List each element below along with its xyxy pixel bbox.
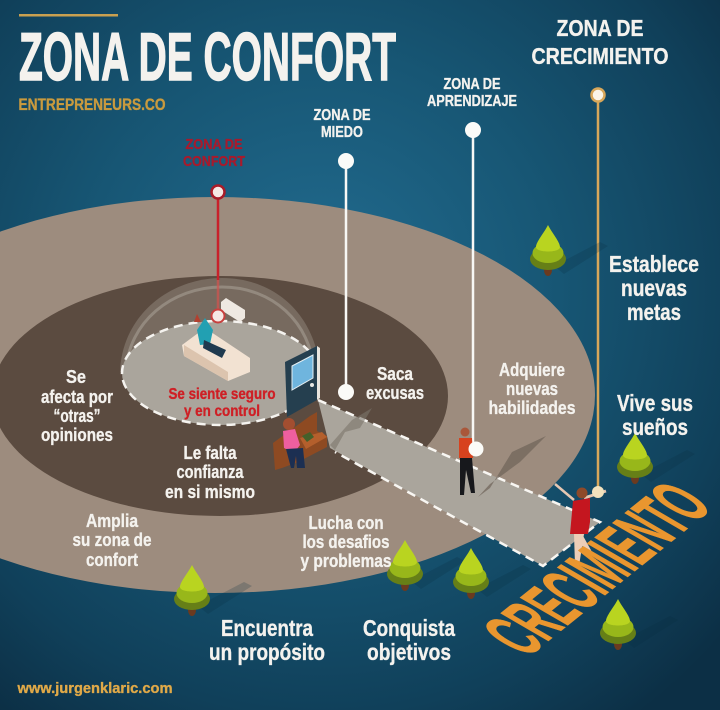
door shadow on path bbox=[330, 408, 372, 450]
air conditioner bbox=[221, 298, 245, 322]
dancing woman in red bbox=[555, 484, 606, 566]
path dashed edges bbox=[318, 400, 600, 566]
pin line: zona de miedo bbox=[338, 153, 354, 400]
comfort zone floor bbox=[122, 321, 318, 425]
label: zona de aprendizaje bbox=[427, 76, 517, 110]
website: www.jurgenklaric.com bbox=[17, 680, 172, 697]
text: lucha con los desafios: Lucha con bbox=[308, 512, 384, 533]
standing woman bbox=[459, 428, 484, 495]
text: se afecta por otras opiniones bbox=[41, 366, 113, 445]
text: se siente seguro bbox=[168, 386, 276, 420]
text: se siente seguro: y en control bbox=[184, 403, 260, 420]
accent line bbox=[19, 14, 118, 16]
text: saca excusas bbox=[366, 363, 424, 403]
label: zona de confort: CONFORT bbox=[183, 153, 245, 170]
title: ZONA DE CONFORT bbox=[19, 19, 396, 95]
text: se afecta por otras opiniones: opiniones bbox=[41, 424, 113, 445]
text: establece nuevas metas bbox=[609, 251, 699, 325]
text: vive sus suenos bbox=[617, 390, 693, 440]
pin line: zona de crecimiento bbox=[592, 88, 604, 490]
text: amplia su zona de confort: confort bbox=[86, 549, 138, 570]
glass dome bbox=[120, 278, 320, 372]
fear zone ellipse bbox=[0, 276, 448, 516]
sofa with person bbox=[182, 314, 250, 381]
text: le falta confianza: Le falta bbox=[184, 442, 237, 463]
text: conquista objetivos: Conquista bbox=[363, 615, 455, 641]
text: se siente seguro: Se siente seguro bbox=[168, 386, 276, 403]
text: establece nuevas metas: metas bbox=[627, 299, 681, 325]
person shadow on ground bbox=[478, 436, 546, 497]
text: adquiere nuevas habilidades: Adquiere bbox=[499, 359, 565, 380]
pin line: zona de confort bbox=[212, 186, 224, 322]
trees bbox=[174, 225, 695, 650]
growth path bbox=[318, 400, 600, 566]
text: encuentra un proposito bbox=[209, 615, 325, 665]
text: saca excusas: Saca bbox=[377, 363, 414, 384]
text: lucha con los desafios bbox=[300, 512, 392, 571]
text: adquiere nuevas habilidades: nuevas bbox=[506, 378, 558, 399]
text: saca excusas: excusas bbox=[366, 382, 424, 403]
label: zona de confort bbox=[183, 136, 245, 170]
outer zone ellipse bbox=[0, 197, 595, 593]
text: le falta confianza: confianza bbox=[176, 461, 244, 482]
text: adquiere nuevas habilidades: habilidades bbox=[488, 397, 576, 418]
text: vive sus suenos: sueños bbox=[622, 414, 688, 440]
text: adquiere nuevas habilidades bbox=[488, 359, 576, 418]
door bbox=[285, 346, 320, 417]
text: lucha con los desafios: y problemas bbox=[300, 550, 392, 571]
text: establece nuevas metas: nuevas bbox=[621, 275, 687, 301]
label: zona de crecimiento: CRECIMIENTO bbox=[532, 43, 668, 69]
text: amplia su zona de confort: Amplia bbox=[86, 510, 139, 531]
text: encuentra un proposito: Encuentra bbox=[221, 615, 313, 641]
text: se afecta por otras opiniones: “otras” bbox=[54, 405, 100, 426]
brand: ENTREPRENEURS.CO bbox=[18, 95, 166, 114]
text: encuentra un proposito: un propósito bbox=[209, 639, 325, 665]
label: zona de miedo: ZONA DE bbox=[314, 107, 371, 124]
text: se afecta por otras opiniones: afecta por bbox=[41, 386, 113, 407]
text: conquista objetivos: objetivos bbox=[367, 639, 451, 665]
label: zona de aprendizaje: ZONA DE bbox=[444, 76, 501, 93]
text: le falta confianza bbox=[165, 442, 255, 502]
text: lucha con los desafios: los desafios bbox=[302, 531, 390, 552]
label: zona de aprendizaje: APRENDIZAJE bbox=[427, 93, 517, 110]
text: amplia su zona de confort: su zona de bbox=[72, 529, 152, 550]
woman on bench bbox=[273, 412, 327, 470]
text: vive sus suenos: Vive sus bbox=[617, 390, 693, 416]
pin line: zona de aprendizaje bbox=[465, 122, 481, 450]
text: establece nuevas metas: Establece bbox=[609, 251, 699, 277]
text: le falta confianza: en si mismo bbox=[165, 481, 255, 502]
text: se afecta por otras opiniones: Se bbox=[66, 366, 86, 387]
text: amplia su zona de confort bbox=[72, 510, 152, 570]
text: conquista objetivos bbox=[363, 615, 455, 665]
label: zona de miedo: MIEDO bbox=[321, 124, 363, 141]
label: zona de crecimiento bbox=[532, 15, 668, 69]
label: zona de miedo bbox=[314, 107, 371, 141]
label: zona de crecimiento: ZONA DE bbox=[556, 15, 644, 41]
label: zona de confort: ZONA DE bbox=[186, 136, 242, 153]
